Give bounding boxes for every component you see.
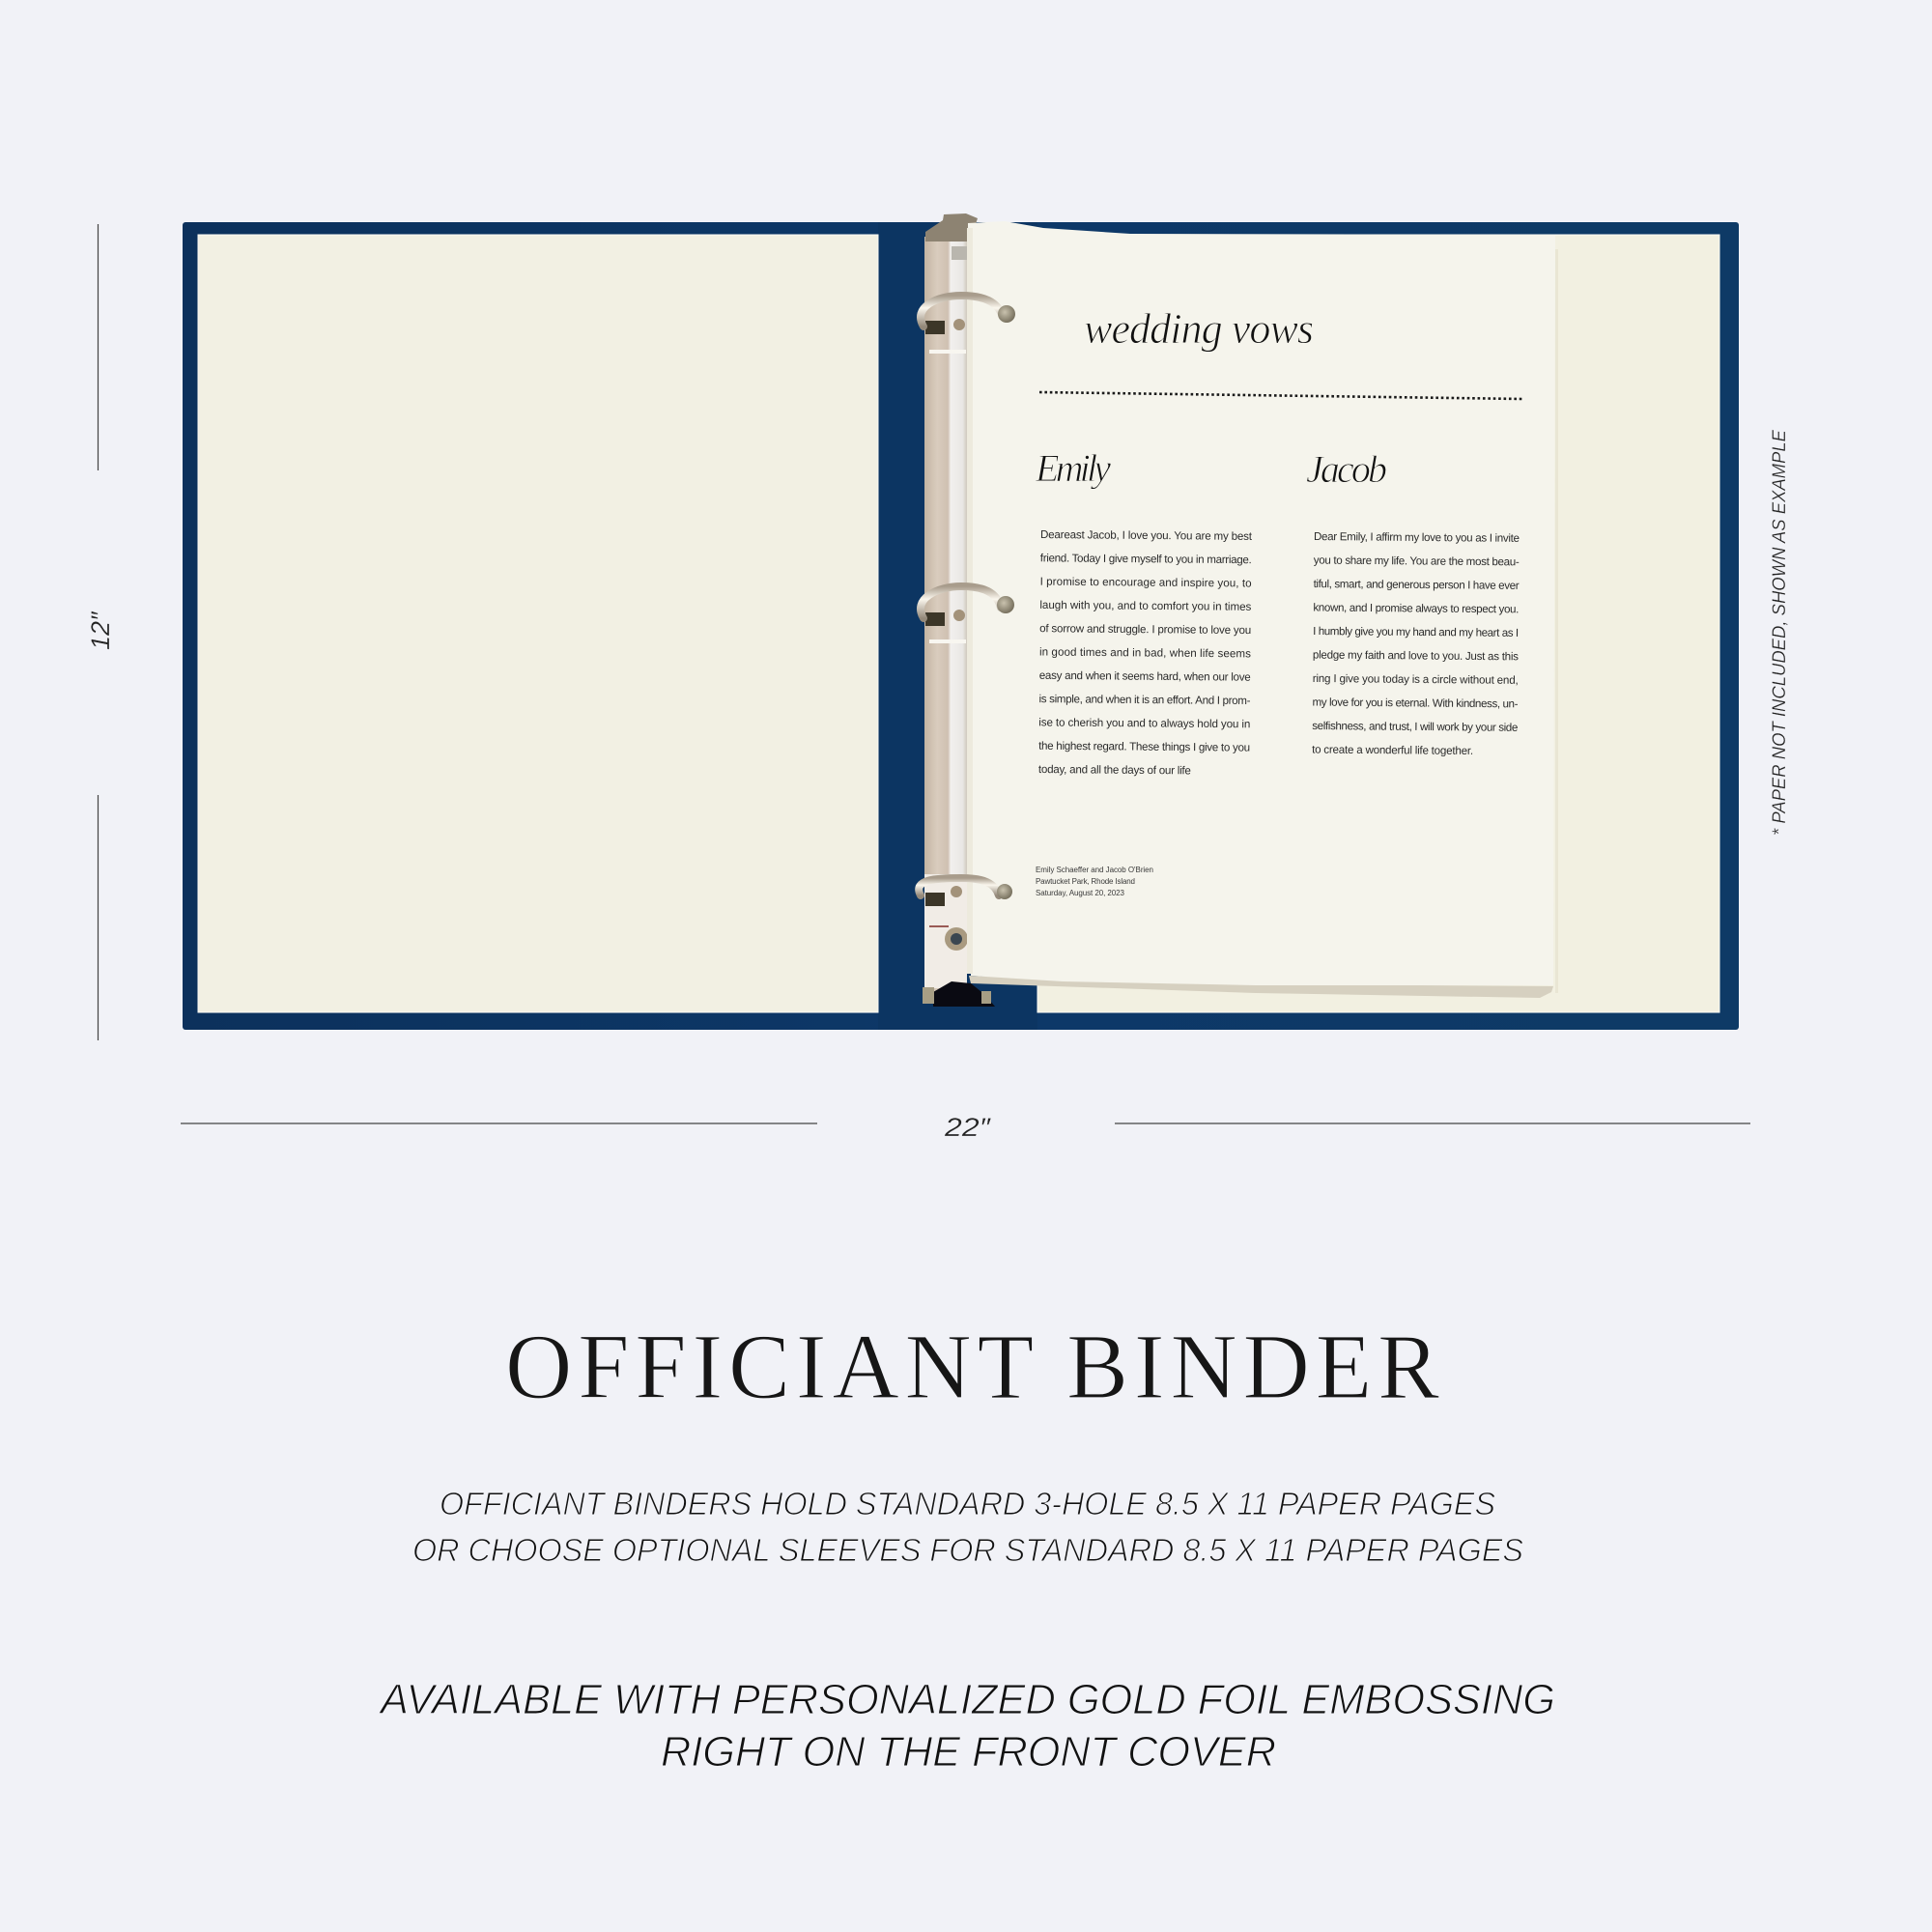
ceremony details: Saturday, August 20, 2023 [1036,889,1125,897]
open binder [183,213,1739,1030]
ceremony details: Pawtucket Park, Rhode Island [1036,877,1135,886]
shadow beside vow page [1555,249,1558,993]
left cream panel [198,235,878,1012]
vows text: Emily: friend. Today I give myself to you in marriage. [1040,552,1252,566]
right cream panel [1037,235,1719,1012]
rivet [945,927,968,951]
ring slots [925,321,945,334]
ceremony details [1036,866,1153,897]
vows text: Jacob: my love for you is eternal. With kindness, un- [1312,696,1519,710]
vows text: Emily: ise to cherish you and to always hold you in [1038,716,1250,730]
dotted divider [1039,392,1522,399]
top clip [925,213,978,242]
metal ring mechanism [923,213,995,1007]
binder cover [183,222,1739,1030]
paper stack edge [969,976,1553,998]
vows text: Jacob: to create a wonderful life together. [1312,743,1473,757]
vows text: Jacob: you to share my life. You are the most beau- [1314,554,1520,568]
vows text: Jacob: I humbly give you my hand and my heart as I [1313,625,1519,639]
spine shading [878,222,1037,1030]
binder rings [919,296,1015,899]
vows text: Jacob: ring I give you today is a circle without end, [1313,672,1519,687]
heading: wedding vows: wedding vows [1084,305,1314,353]
embossing description [378,1676,1555,1776]
paper size description: OR CHOOSE OPTIONAL SLEEVES FOR STANDARD 8.5 X 11 PAPER PAGES [412,1532,1523,1568]
vows text: Jacob: tiful, smart, and generous person I have ever [1314,578,1520,592]
width dimension: 22 inches: 22″ [944,1113,992,1142]
metal bar [924,237,967,995]
note: paper not included: * PAPER NOT INCLUDED, SHOWN AS EXAMPLE [1770,430,1790,836]
name: Jacob: Jacob [1306,447,1387,491]
lower bar highlight [924,874,967,988]
vows text: Emily: laugh with you, and to comfort you in times [1039,599,1252,613]
bottom clip [933,981,995,1007]
vow page [967,221,1555,985]
vows text: Emily: today, and all the days of our life [1038,763,1191,777]
paper size description [412,1486,1523,1568]
vows text: Emily: easy and when it seems hard, when our love [1039,669,1251,684]
ceremony details: Emily Schaeffer and Jacob O'Brien [1036,866,1153,874]
vows text: Jacob: selfishness, and trust, I will work by your side [1312,720,1518,734]
vows text: Emily: of sorrow and struggle. I promise to love you [1039,622,1251,637]
vows text: Jacob [1312,530,1520,757]
height dimension: 12 inches: 12″ [86,611,115,650]
embossing description: RIGHT ON THE FRONT COVER [661,1728,1276,1776]
vows text: Emily: I promise to encourage and inspire you, to [1040,576,1252,590]
vows text: Emily: in good times and in bad, when life seems [1039,645,1251,660]
page inner margin [967,228,973,974]
vows text: Emily [1038,528,1253,778]
vows text: Jacob: pledge my faith and love to you. Just as this [1313,648,1519,663]
middle ring [921,586,1014,618]
vows text: Jacob: known, and I promise always to respect you. [1313,601,1519,615]
vows text: Emily: Deareast Jacob, I love you. You are my best [1040,528,1253,543]
vows text: Emily: is simple, and when it is an effort. And I prom- [1038,693,1251,707]
bottom ring [919,878,1012,899]
name: Emily: Emily [1035,446,1111,490]
vows text: Emily: the highest regard. These things I give to you [1038,740,1250,754]
top ring [921,296,1015,327]
vows text: Jacob: Dear Emily, I affirm my love to you as I invite [1314,530,1520,545]
embossing description: AVAILABLE WITH PERSONALIZED GOLD FOIL EMBOSSING [378,1676,1555,1723]
bar notches [929,350,966,354]
paper size description: OFFICIANT BINDERS HOLD STANDARD 3-HOLE 8.5 X 11 PAPER PAGES [440,1486,1495,1521]
title: OFFICIANT BINDER [505,1315,1439,1418]
